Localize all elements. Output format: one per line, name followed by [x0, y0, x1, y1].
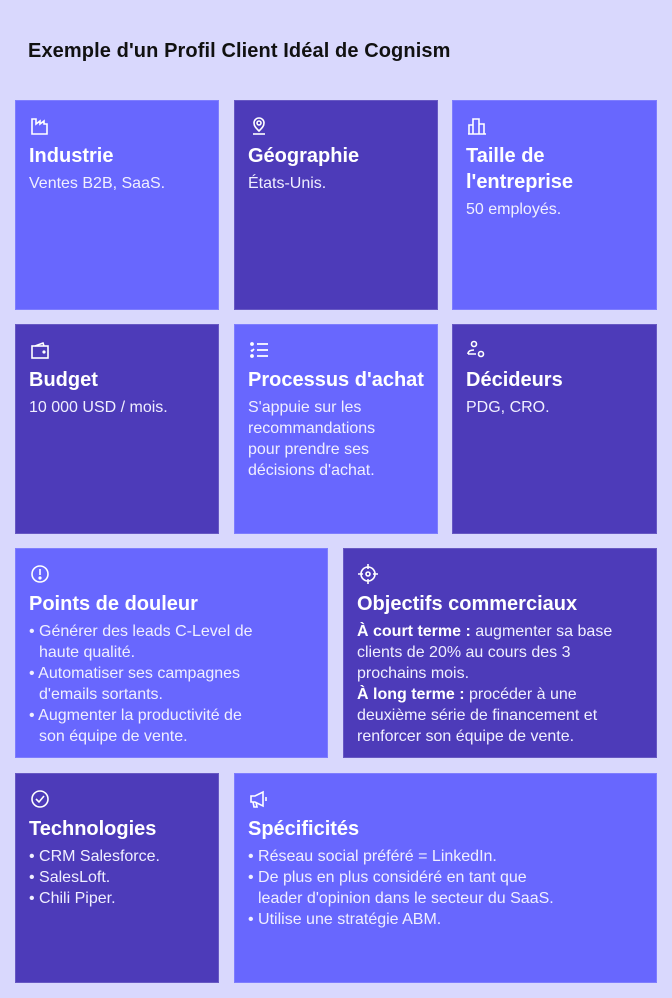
panel: technologies: Chili Piper. — [39, 890, 116, 907]
panel: points de douleur — [15, 548, 328, 758]
panel: decideurs: PDG, CRO. — [466, 399, 550, 416]
panel: objectifs: À court terme : augmenter sa base — [357, 623, 612, 640]
panel: industrie — [15, 100, 219, 310]
panel: objectifs: renforcer son équipe de vente. — [357, 728, 574, 745]
icon: check circle — [31, 790, 49, 808]
panel: taille — [452, 100, 657, 310]
panel: specificites: Spécificités — [248, 818, 359, 840]
panel: specificites: De plus en plus considéré en tant que — [258, 869, 527, 886]
panel: points de douleur: Augmenter la productivité de — [38, 707, 242, 724]
panel: taille: l'entreprise — [466, 171, 573, 193]
panel: decideurs: Décideurs — [466, 369, 563, 391]
title: Exemple d'un Profil Client Idéal de Cognism — [28, 40, 450, 62]
icon: alert — [31, 565, 49, 583]
panel: specificites: leader d'opinion dans le secteur du SaaS. — [258, 890, 554, 907]
panel: points de douleur: Générer des leads C-Level de — [39, 623, 252, 640]
panel: technologies — [15, 773, 219, 983]
panel: taille: 50 employés. — [466, 201, 561, 218]
icon: target — [358, 564, 378, 584]
panel: points de douleur: Points de douleur — [29, 593, 198, 615]
icon: wallet — [31, 342, 49, 359]
panel: budget: Budget — [29, 369, 98, 391]
panel: objectifs — [343, 548, 657, 758]
panel: points de douleur: son équipe de vente. — [39, 728, 188, 745]
panel: geographie — [234, 100, 438, 310]
icon: megaphone — [250, 790, 267, 808]
panel: specificites — [234, 773, 657, 983]
panel: decideurs — [452, 324, 657, 534]
panel: taille: Taille de — [466, 145, 545, 167]
panel: budget — [15, 324, 219, 534]
panel: objectifs: À long terme : procéder à une — [357, 686, 577, 703]
panel: technologies: Technologies — [29, 818, 156, 840]
panel: processus: pour prendre ses — [248, 441, 369, 458]
panel: industrie: Industrie — [29, 145, 113, 167]
panel: budget: 10 000 USD / mois. — [29, 399, 168, 416]
panel: points de douleur: d'emails sortants. — [39, 686, 163, 703]
panel: technologies: SalesLoft. — [39, 869, 110, 886]
panel: points de douleur: Automatiser ses campagnes — [38, 665, 240, 682]
icon: pin — [253, 117, 265, 135]
panel: objectifs: clients de 20% au cours des 3 — [357, 644, 570, 661]
icon: buildings — [468, 118, 486, 135]
panel: industrie: Ventes B2B, SaaS. — [29, 175, 165, 192]
panel: specificites: Réseau social préféré = LinkedIn. — [258, 848, 497, 865]
icon: checklist — [250, 342, 268, 358]
panel: technologies: CRM Salesforce. — [39, 848, 160, 865]
panel: specificites: Utilise une stratégie ABM. — [258, 911, 441, 928]
panel: points de douleur: haute qualité. — [39, 644, 135, 661]
panel: geographie: Géographie — [248, 145, 359, 167]
panel: processus — [234, 324, 438, 534]
panel: processus: décisions d'achat. — [248, 462, 375, 479]
panel: geographie: États-Unis. — [248, 175, 326, 192]
panel: processus: S'appuie sur les — [248, 399, 361, 416]
panel: objectifs: Objectifs commerciaux — [357, 593, 577, 615]
panel: objectifs: prochains mois. — [357, 665, 469, 682]
panel: processus: Processus d'achat — [248, 369, 424, 391]
icon: person gear — [467, 340, 484, 358]
panel: objectifs: deuxième série de financement et — [357, 707, 597, 724]
icon: factory — [31, 118, 48, 135]
panel: processus: recommandations — [248, 420, 375, 437]
